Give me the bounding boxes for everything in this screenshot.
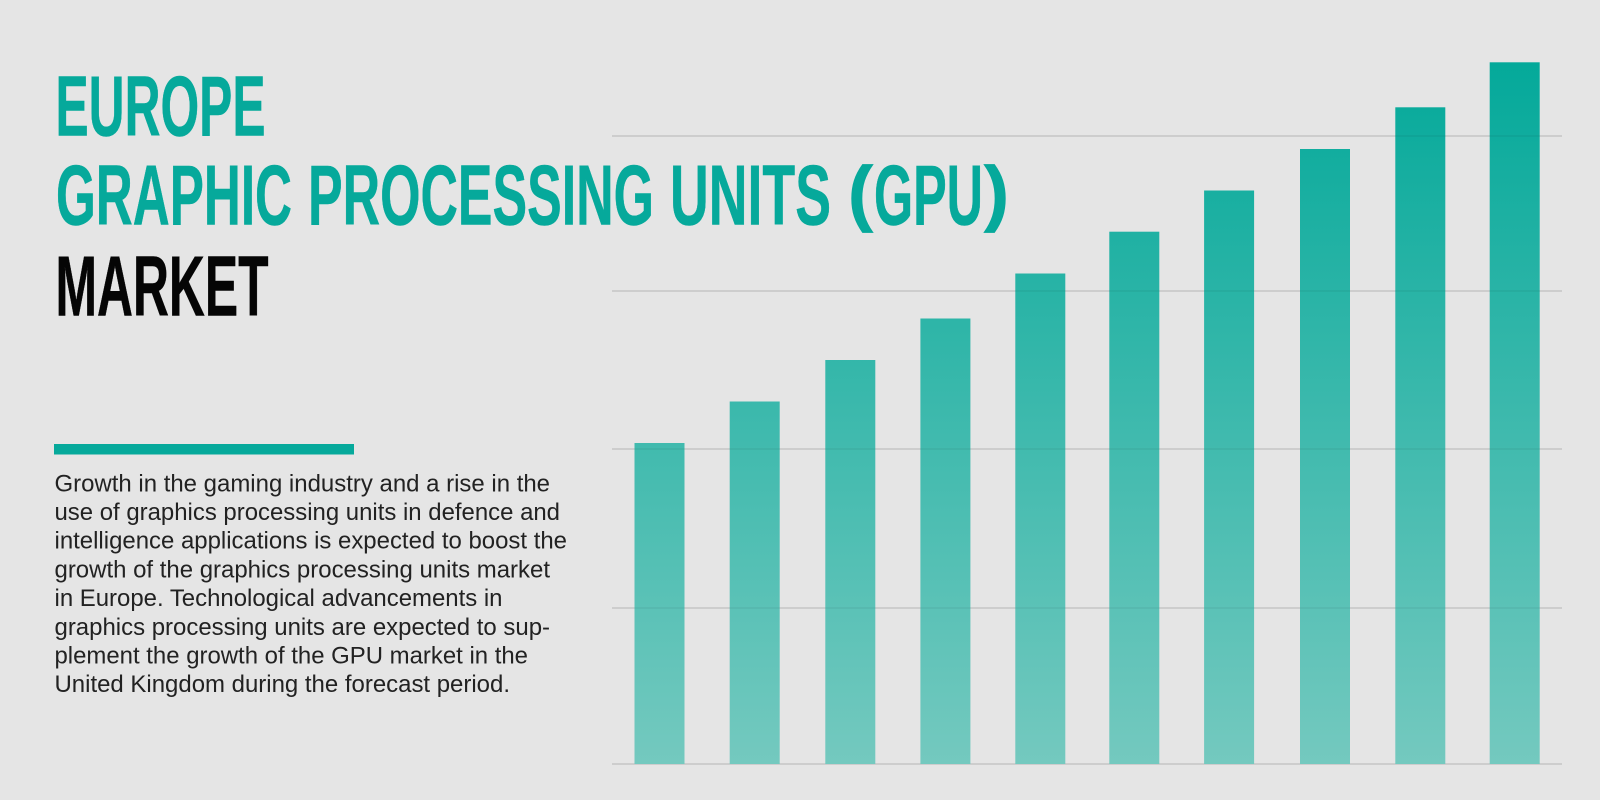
title line: Graphic Processing Units (GPU): PROCESSING bbox=[308, 148, 654, 244]
description text block: graphics processing units are expected to sup- bbox=[54, 614, 550, 641]
bar 9 bbox=[1395, 107, 1445, 764]
title line: Graphic Processing Units (GPU): ( bbox=[848, 153, 874, 234]
title line: Graphic Processing Units (GPU): GPU bbox=[874, 148, 983, 244]
title line: Graphic Processing Units (GPU) bbox=[56, 148, 1009, 244]
description text block: growth of the graphics processing units market bbox=[54, 556, 550, 583]
title line: Europe: EUROPE bbox=[56, 60, 266, 154]
description text block: Growth in the gaming industry and a rise in the bbox=[54, 470, 550, 497]
description text block bbox=[54, 470, 567, 698]
title line: Graphic Processing Units (GPU): UNITS bbox=[670, 148, 831, 244]
description text block: use of graphics processing units in defence and bbox=[54, 499, 560, 526]
description text block: in Europe. Technological advancements in bbox=[54, 585, 502, 612]
description text block: plement the growth of the GPU market in the bbox=[54, 642, 528, 670]
bar 5 bbox=[1015, 274, 1065, 764]
bar 1 bbox=[634, 443, 684, 764]
bar 10 bbox=[1490, 62, 1540, 764]
title line: Market: MARKET bbox=[56, 240, 268, 334]
bar 6 bbox=[1109, 232, 1159, 764]
title bbox=[56, 60, 1009, 334]
bar 2 bbox=[730, 402, 780, 764]
title line: Graphic Processing Units (GPU): GRAPHIC bbox=[56, 148, 292, 244]
bar chart bbox=[612, 62, 1562, 764]
bar 8 bbox=[1300, 149, 1350, 764]
description text block: United Kingdom during the forecast period. bbox=[54, 671, 510, 698]
accent bar bbox=[54, 444, 354, 454]
bar 3 bbox=[825, 360, 875, 764]
bar 4 bbox=[920, 318, 970, 764]
bar 7 bbox=[1204, 190, 1254, 764]
description text block: intelligence applications is expected to boost the bbox=[54, 528, 567, 555]
title line: Graphic Processing Units (GPU): ) bbox=[984, 153, 1009, 234]
